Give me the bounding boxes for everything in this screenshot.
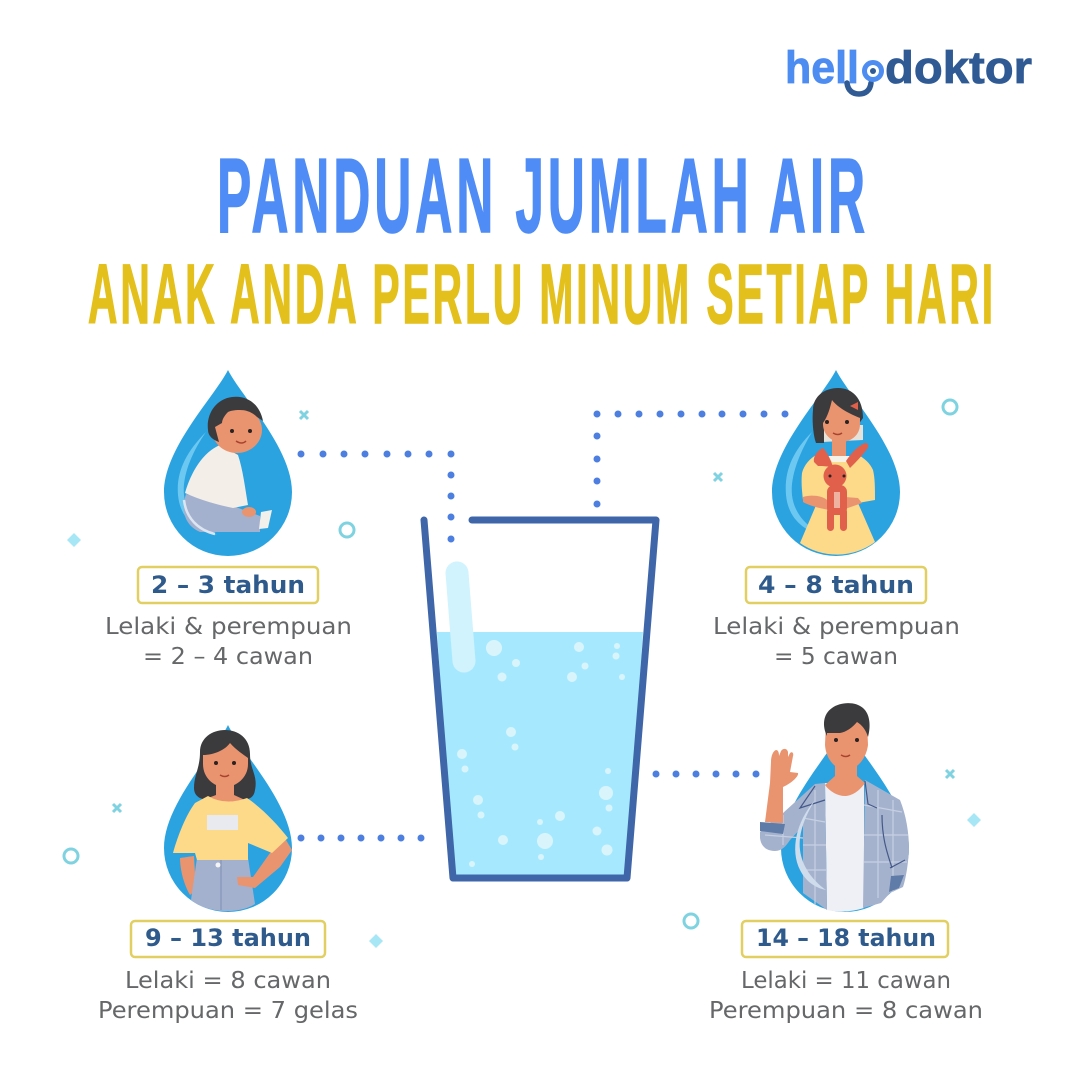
age label: 2-3 tahun [138,567,318,603]
water drop [164,370,292,556]
hair [824,703,870,737]
shoe [259,510,272,529]
skirt [191,858,255,911]
jacket folds [800,781,905,868]
age label: 9-13 tahun: 9 – 13 tahun [145,924,311,952]
pants highlight [184,500,215,534]
age label: 9-13 tahun [131,921,325,957]
text: 2-3 tahun amounts [105,612,352,670]
eyes [214,761,236,765]
age label: 14-18 tahun [742,921,948,957]
dress [800,454,875,555]
text: 9-13 tahun amounts: Lelaki = 8 cawan [125,966,331,994]
drop highlight [178,432,217,535]
text: 9-13 tahun amounts: Perempuan = 7 gelas [98,996,358,1024]
smile [220,775,229,776]
age label: 2-3 tahun: 2 – 3 tahun [151,571,305,599]
face [212,407,262,453]
character: teenage boy waving in drop [760,703,909,912]
skirt seam and button [220,860,222,910]
logo: hellodoktor: hell [785,42,859,93]
straw highlight [457,573,464,661]
left arm [180,856,196,895]
neck [825,762,865,796]
jacket left [760,783,827,910]
white neckline [828,456,850,462]
drop highlight [786,432,824,535]
text: 4-8 tahun amounts [713,612,960,670]
smile [841,755,850,756]
arms [803,496,862,510]
decorative sparkles and rings [64,400,981,948]
face [823,400,860,442]
hand [242,507,256,517]
bubbles [457,640,625,867]
text: 2-3 tahun amounts: = 2 – 4 cawan [143,642,313,670]
eyes [834,738,859,742]
hair [194,730,256,800]
logo: hellodoktor: doktor [885,42,1032,93]
eyes [230,429,252,433]
face [825,722,868,770]
glass of water [424,520,656,878]
rabbit belly [834,492,840,508]
dotted connector: top left [298,450,454,542]
eyes [825,420,849,478]
text: 4-8 tahun amounts: Lelaki & perempuan [713,612,960,640]
text: 14-18 tahun amounts: Lelaki = 11 cawan [741,966,951,994]
dotted connector: bottom right [652,770,760,778]
age label: 4-8 tahun: 4 – 8 tahun [758,571,914,599]
rabbit [814,443,868,531]
age label: 4-8 tahun [746,567,926,603]
name tag [207,815,238,830]
right arm [237,840,292,888]
glass outline [424,520,656,878]
water drop [164,725,292,912]
character: older girl in drop [164,725,292,912]
text: 4-8 tahun amounts: = 5 cawan [774,642,898,670]
hair back [813,388,863,443]
plaid lines [765,790,908,905]
jacket right [863,780,909,908]
character: toddler in drop [164,370,292,556]
text: 14-18 tahun amounts: Perempuan = 8 cawan [709,996,983,1024]
dotted connector: top right [594,410,788,508]
shirt [173,796,288,860]
face [203,743,248,787]
water drop [781,725,909,912]
water drop [772,370,900,556]
jacket highlight [795,800,826,890]
text: 2-3 tahun amounts: Lelaki & perempuan [105,612,352,640]
neck [832,436,846,458]
text: 14-18 tahun amounts [709,966,983,1024]
age label: 14-18 tahun: 14 – 18 tahun [756,924,936,952]
pants [184,494,260,532]
water [437,632,643,878]
pocket cuff [889,875,904,892]
raised arm [765,749,798,823]
white shirt [825,783,864,912]
character: girl with rabbit in drop [772,370,900,556]
hair [208,397,263,442]
smile [236,441,246,443]
logo: hellodoktor [785,42,1032,94]
smile [833,433,842,434]
text: 9-13 tahun amounts [98,966,358,1024]
shirt [185,445,248,508]
cuff [760,822,785,834]
collar patch [822,425,863,442]
hair clip [850,402,858,410]
dotted connector: bottom left [298,834,424,842]
neck [208,780,245,804]
